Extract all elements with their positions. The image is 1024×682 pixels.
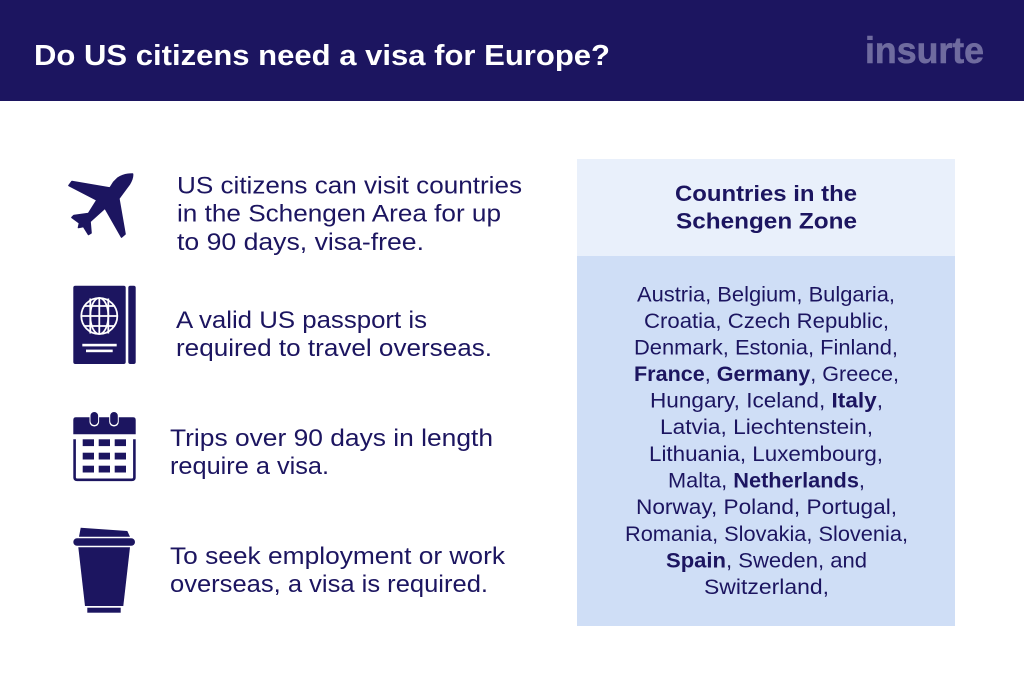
panel body background [577, 256, 955, 626]
panel heading background [577, 159, 955, 256]
text: visa-free visits: US citizens can visit countries [177, 172, 522, 200]
text: employment visa: overseas, a visa is required. [170, 571, 488, 598]
country list: Austria, Belgium, Bulgaria, [637, 284, 895, 306]
icon: takeaway cup [73, 528, 135, 613]
country list: Spain, Sweden, and [666, 550, 867, 572]
country list: Lithuania, Luxembourg, [649, 443, 883, 466]
text: passport requirement: A valid US passport is [176, 307, 427, 334]
text: employment visa [170, 543, 506, 598]
panel: countries in the Schengen Zone [577, 159, 955, 626]
icon: airplane [69, 174, 133, 237]
country list [625, 284, 908, 599]
country list: France, Germany, Greece, [634, 363, 899, 386]
country list: Hungary, Iceland, Italy, [650, 390, 883, 412]
panel heading: Schengen Zone [676, 208, 857, 234]
country list: Malta, Netherlands, [668, 470, 865, 492]
header band [0, 0, 1024, 101]
text: passport requirement [176, 307, 492, 362]
panel heading: Countries in the [675, 181, 857, 206]
text: employment visa: To seek employment or work [170, 543, 506, 570]
logo: insurte: insurte [865, 30, 984, 71]
icon: passport [73, 286, 136, 364]
icon: calendar [73, 410, 136, 480]
country list: Romania, Slovakia, Slovenia, [625, 523, 908, 546]
country list: Croatia, Czech Republic, [644, 310, 889, 333]
text: passport requirement: required to travel overseas. [176, 335, 492, 362]
text: trips over 90 days: require a visa. [170, 453, 329, 480]
country list: Latvia, Liechtenstein, [660, 416, 873, 439]
country list: Switzerland, [704, 576, 829, 599]
country list: Norway, Poland, Portugal, [636, 496, 897, 519]
text: trips over 90 days: Trips over 90 days in length [170, 425, 493, 452]
title: Do US citizens need a visa for Europe? [34, 40, 610, 72]
country list: Denmark, Estonia, Finland, [634, 336, 898, 360]
panel heading [675, 181, 857, 234]
text: visa-free visits: to 90 days, visa-free. [177, 229, 424, 256]
text: visa-free visits [177, 172, 522, 256]
text: visa-free visits: in the Schengen Area for up [177, 200, 501, 228]
text: trips over 90 days [170, 425, 493, 480]
